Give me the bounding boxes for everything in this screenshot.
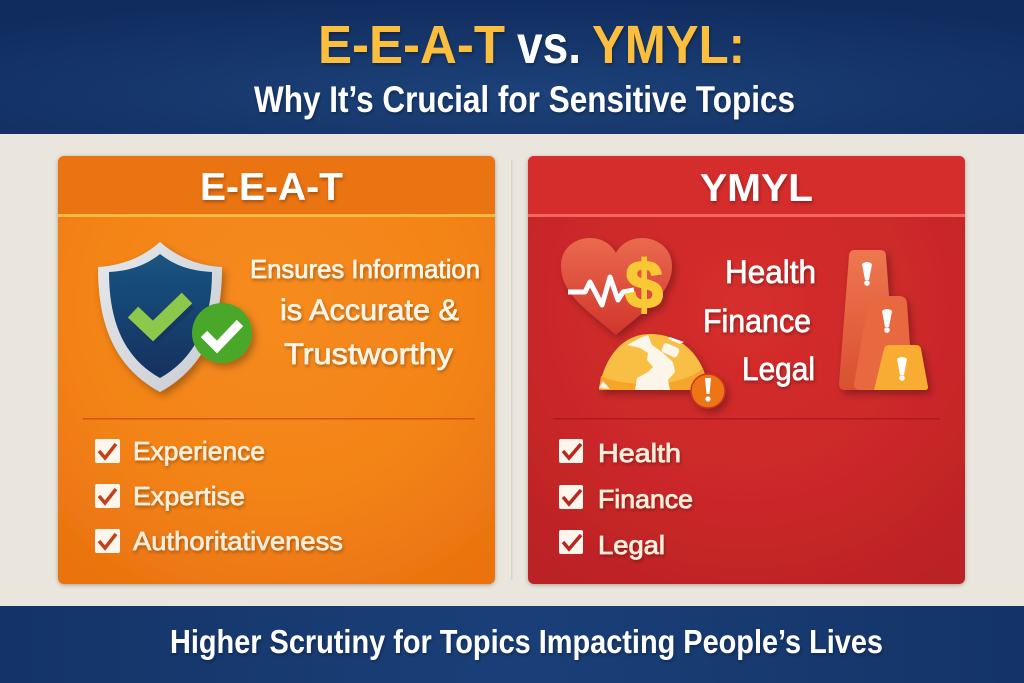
title (318, 15, 745, 75)
panel heading: YMYL: YMYL (700, 167, 813, 210)
topic labels: Finance (703, 303, 811, 339)
icon: warning towers (839, 250, 928, 390)
page background (0, 134, 1024, 606)
item: Expertise: Expertise (133, 481, 245, 511)
item: Legal: Legal (598, 530, 665, 560)
item: Health: Health (598, 438, 681, 468)
panel heading: E-E-A-T: E-E-A-T (200, 166, 343, 209)
description text (250, 254, 480, 371)
title: YMYL: (592, 15, 745, 75)
icon: globe dome with warning (599, 334, 725, 408)
description text: Ensures Information (250, 254, 480, 284)
item: Finance: Finance (598, 484, 693, 514)
icon: shield with check (98, 242, 252, 392)
topic labels: Health (725, 254, 816, 290)
subtitle: Why It’s Crucial for Sensitive Topics (254, 79, 795, 120)
icon: heart with pulse and dollar (561, 238, 672, 335)
title: vs. (517, 15, 581, 75)
checklist: YMYL (559, 438, 693, 560)
description text: is Accurate & (280, 294, 459, 327)
panel: YMYL (528, 156, 965, 584)
icon: heart with pulse and dollar: $ (625, 247, 663, 323)
footer band (0, 606, 1024, 683)
panel: E-E-A-T (58, 156, 495, 584)
header band (0, 0, 1024, 134)
topic labels (703, 254, 816, 387)
topic labels: Legal (742, 351, 815, 387)
item: Authoritativeness: Authoritativeness (133, 526, 343, 556)
title: E-E-A-T (318, 15, 505, 75)
description text: Trustworthy (284, 338, 453, 371)
item: Experience: Experience (133, 436, 265, 466)
checklist: E-E-A-T (95, 436, 343, 556)
footer text: Higher Scrutiny for Topics Impacting People’s Lives (170, 623, 883, 660)
